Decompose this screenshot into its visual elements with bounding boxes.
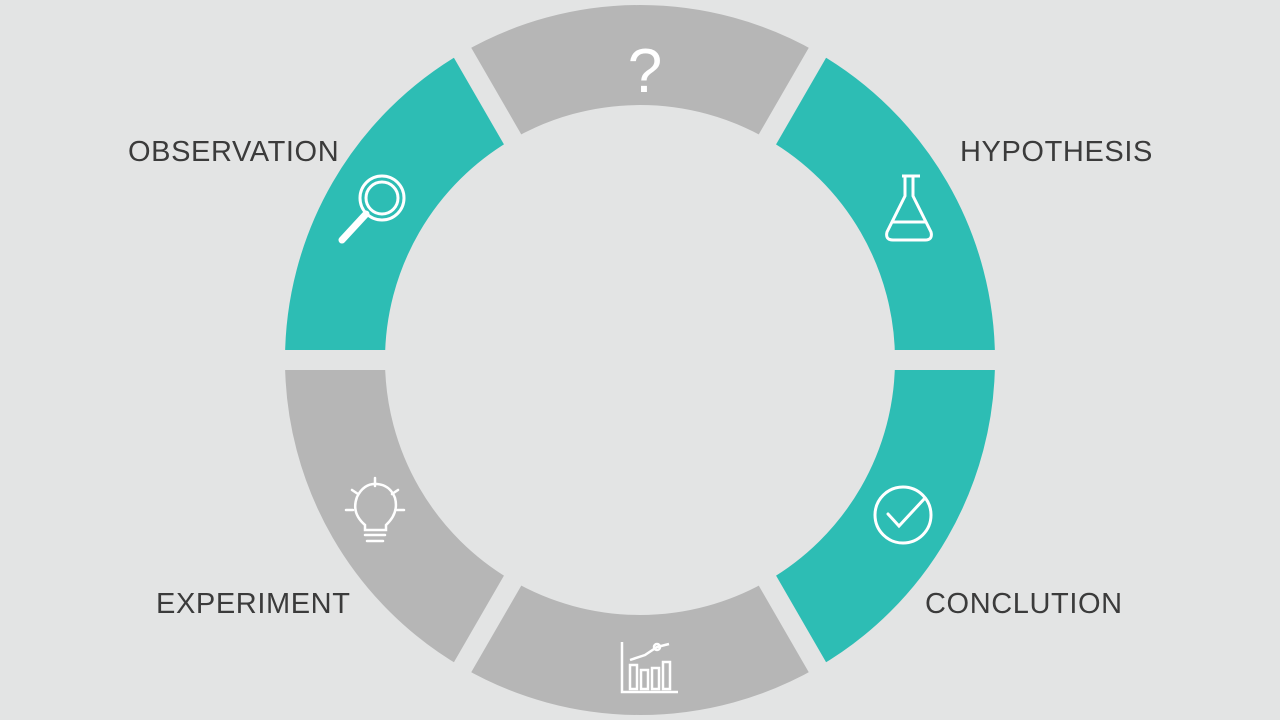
label: experiment: EXPERIMENT: [156, 588, 351, 620]
segment: conclusion (lower right): [792, 360, 945, 624]
segment: analysis (bottom): [488, 624, 792, 665]
label: observation: OBSERVATION: [128, 136, 339, 168]
label: hypothesis: HYPOTHESIS: [960, 136, 1153, 168]
segment: observation (upper left): [335, 96, 488, 360]
icon: check circle: [875, 487, 931, 543]
segment: experiment (lower left): [335, 360, 488, 624]
segment: question (top): [488, 55, 792, 96]
icon: magnifier: [342, 176, 404, 240]
segment: hypothesis (upper right): [792, 96, 945, 360]
icon: question mark: ?: [628, 37, 662, 106]
label: conclution: CONCLUTION: [925, 588, 1123, 620]
icon: bar chart: [622, 642, 678, 692]
icon: flask: [887, 176, 931, 240]
icon: light bulb: [346, 478, 404, 541]
